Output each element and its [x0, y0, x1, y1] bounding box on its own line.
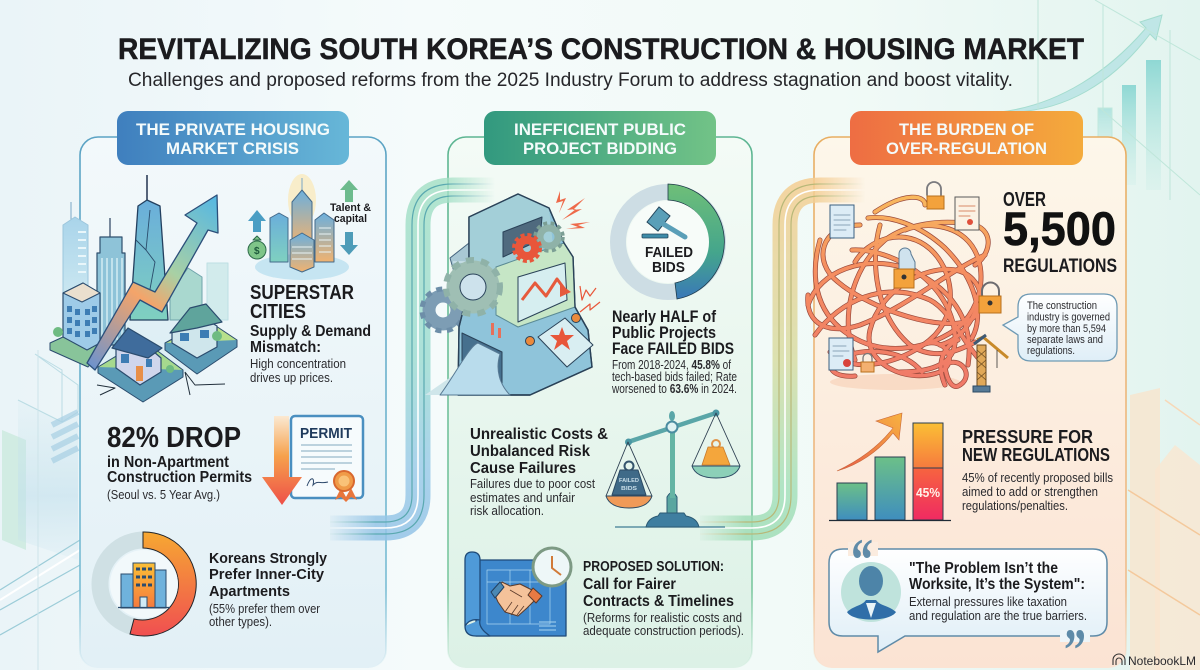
stat: over 5,500 regulations: OVER: [1003, 189, 1046, 211]
text block: 82% drop: [107, 422, 252, 502]
icon: permit with down arrow: [262, 416, 363, 505]
heading: private housing market crisis: MARKET CRISIS: [166, 139, 299, 158]
heading: inefficient public project bidding: [484, 111, 716, 165]
text block: superstar cities: [250, 282, 371, 385]
bar chart: new regulations: 45%: [916, 486, 940, 500]
text block: koreans prefer inner-city apartments: Apartments: [209, 584, 290, 600]
text block: superstar cities: Supply & Demand: [250, 323, 371, 340]
callout: 5,594 laws: industry is governed: [1027, 312, 1110, 324]
icon: crane: [973, 335, 1008, 392]
title: REVITALIZING SOUTH KOREA’S CONSTRUCTION & HOUSING MARKET: [118, 33, 1084, 66]
text block: koreans prefer inner-city apartments: (55% prefer them over: [209, 602, 320, 616]
callout: 5,594 laws: separate laws and: [1027, 334, 1103, 346]
icon: unbalanced scale: BIDS: [621, 486, 637, 492]
donut chart: 55% prefer apartments: [100, 532, 196, 636]
text block: superstar cities: SUPERSTAR: [250, 282, 354, 304]
heading: private housing market crisis: THE PRIVATE HOUSING: [136, 120, 330, 139]
panel: public project bidding: [448, 137, 752, 668]
label: talent and capital: capital: [334, 213, 367, 225]
callout: 5,594 laws: by more than 5,594: [1027, 323, 1106, 335]
illustration: broken bidding machine: [422, 191, 600, 395]
quote bubble: “: [851, 527, 873, 593]
connector ribbon: housing to bidding: [330, 184, 495, 534]
text block: nearly half failed: [611, 308, 737, 396]
quote bubble: [829, 527, 1107, 670]
text block: unrealistic costs: estimates and unfair: [470, 491, 575, 505]
text block: nearly half failed: From 2018-2024, 45.8% of: [612, 358, 731, 372]
text block: nearly half failed: tech-based bids failed; Rate: [612, 370, 737, 384]
illustration: regulation tangle: [808, 182, 1001, 390]
callout: 5,594 laws: regulations.: [1027, 345, 1075, 357]
text block: proposed solution: Call for Fairer: [583, 576, 676, 593]
text block: pressure for new regulations: [962, 427, 1113, 513]
heading: burden of over-regulation: THE BURDEN OF: [899, 120, 1034, 139]
bar chart: new regulations: [829, 413, 951, 520]
text block: pressure for new regulations: aimed to add or strengthen: [962, 485, 1098, 499]
quote bubble: Worksite, It’s the System":: [909, 576, 1085, 593]
quote bubble: and regulation are the true barriers.: [909, 609, 1087, 623]
text block: superstar cities: High concentration: [250, 356, 346, 371]
icon: unbalanced scale: [606, 410, 740, 527]
text block: 82% drop: (Seoul vs. 5 Year Avg.): [107, 488, 220, 502]
heading: private housing market crisis: [117, 111, 349, 165]
label: talent and capital: [330, 202, 371, 225]
text block: unrealistic costs: risk allocation.: [470, 504, 544, 518]
logo: NotebookLM: NotebookLM: [1128, 654, 1196, 668]
callout: 5,594 laws: The construction: [1027, 300, 1097, 312]
donut chart: failed bids: [618, 184, 724, 299]
stat: over 5,500 regulations: REGULATIONS: [1003, 256, 1117, 277]
text block: unrealistic costs: Cause Failures: [470, 460, 576, 477]
text block: koreans prefer inner-city apartments: Prefer Inner-City: [209, 567, 324, 583]
text block: nearly half failed: worsened to 63.6% in 2024.: [611, 382, 737, 396]
text block: proposed solution: Contracts & Timelines: [583, 593, 734, 610]
text block: koreans prefer inner-city apartments: other types).: [209, 615, 272, 629]
text block: 82% drop: 82% DROP: [107, 422, 241, 454]
text block: proposed solution: PROPOSED SOLUTION:: [583, 559, 724, 575]
connector ribbon: bidding to regulation: [700, 184, 865, 534]
donut chart: failed bids: BIDS: [652, 260, 685, 276]
stat: over 5,500 regulations: 5,500: [1003, 202, 1116, 255]
quote bubble: External pressures like taxation: [909, 595, 1067, 609]
illustration: superstar cities cluster: $: [254, 246, 260, 257]
panel: private housing market crisis: [80, 137, 386, 668]
text block: proposed solution: [583, 559, 744, 638]
text block: nearly half failed: Public Projects: [612, 324, 716, 342]
text block: nearly half failed: Nearly HALF of: [612, 308, 716, 326]
quote bubble: "The Problem Isn’t the: [909, 560, 1058, 577]
text block: 82% drop: Construction Permits: [107, 469, 252, 486]
callout: 5,594 laws: [1003, 294, 1117, 361]
text block: pressure for new regulations: 45% of recently proposed bills: [962, 471, 1113, 485]
heading: inefficient public project bidding: INEFFICIENT PUBLIC: [514, 120, 686, 139]
heading: burden of over-regulation: [850, 111, 1083, 165]
icon: blueprint, handshake and clock: [465, 548, 571, 636]
text block: unrealistic costs: [470, 426, 608, 518]
text block: nearly half failed: Face FAILED BIDS: [612, 340, 734, 358]
text block: pressure for new regulations: PRESSURE FOR: [962, 427, 1093, 447]
label: talent and capital: Talent &: [330, 202, 371, 214]
text block: pressure for new regulations: NEW REGULATIONS: [962, 445, 1110, 465]
text block: koreans prefer inner-city apartments: Koreans Strongly: [209, 551, 327, 567]
subtitle: Challenges and proposed reforms from the 2025 Industry Forum to address stagnation and boost vitality.: [128, 70, 1013, 91]
icon: unbalanced scale: FAILED: [619, 478, 639, 484]
icon: permit with down arrow: PERMIT: [300, 426, 352, 442]
illustration: cityscape with rising arrow: [50, 175, 237, 402]
text block: proposed solution: (Reforms for realistic costs and: [583, 611, 742, 625]
text block: koreans prefer inner-city apartments: [209, 551, 327, 629]
text block: unrealistic costs: Failures due to poor cost: [470, 477, 595, 491]
text block: superstar cities: CITIES: [250, 301, 306, 323]
donut chart: failed bids: FAILED: [645, 245, 693, 261]
text block: proposed solution: adequate construction periods).: [583, 624, 744, 638]
heading: inefficient public project bidding: PROJECT BIDDING: [523, 139, 677, 158]
text block: pressure for new regulations: regulations/penalties.: [962, 499, 1068, 513]
illustration: superstar cities cluster: [248, 174, 358, 280]
text block: superstar cities: Mismatch:: [250, 339, 321, 356]
heading: burden of over-regulation: OVER-REGULATION: [886, 139, 1047, 158]
text block: unrealistic costs: Unrealistic Costs &: [470, 426, 608, 443]
text block: 82% drop: in Non-Apartment: [107, 454, 230, 471]
text block: superstar cities: drives up prices.: [250, 370, 333, 385]
text block: unrealistic costs: Unbalanced Risk: [470, 443, 590, 460]
panel: over-regulation: [814, 137, 1126, 668]
stat: over 5,500 regulations: [1003, 189, 1117, 277]
